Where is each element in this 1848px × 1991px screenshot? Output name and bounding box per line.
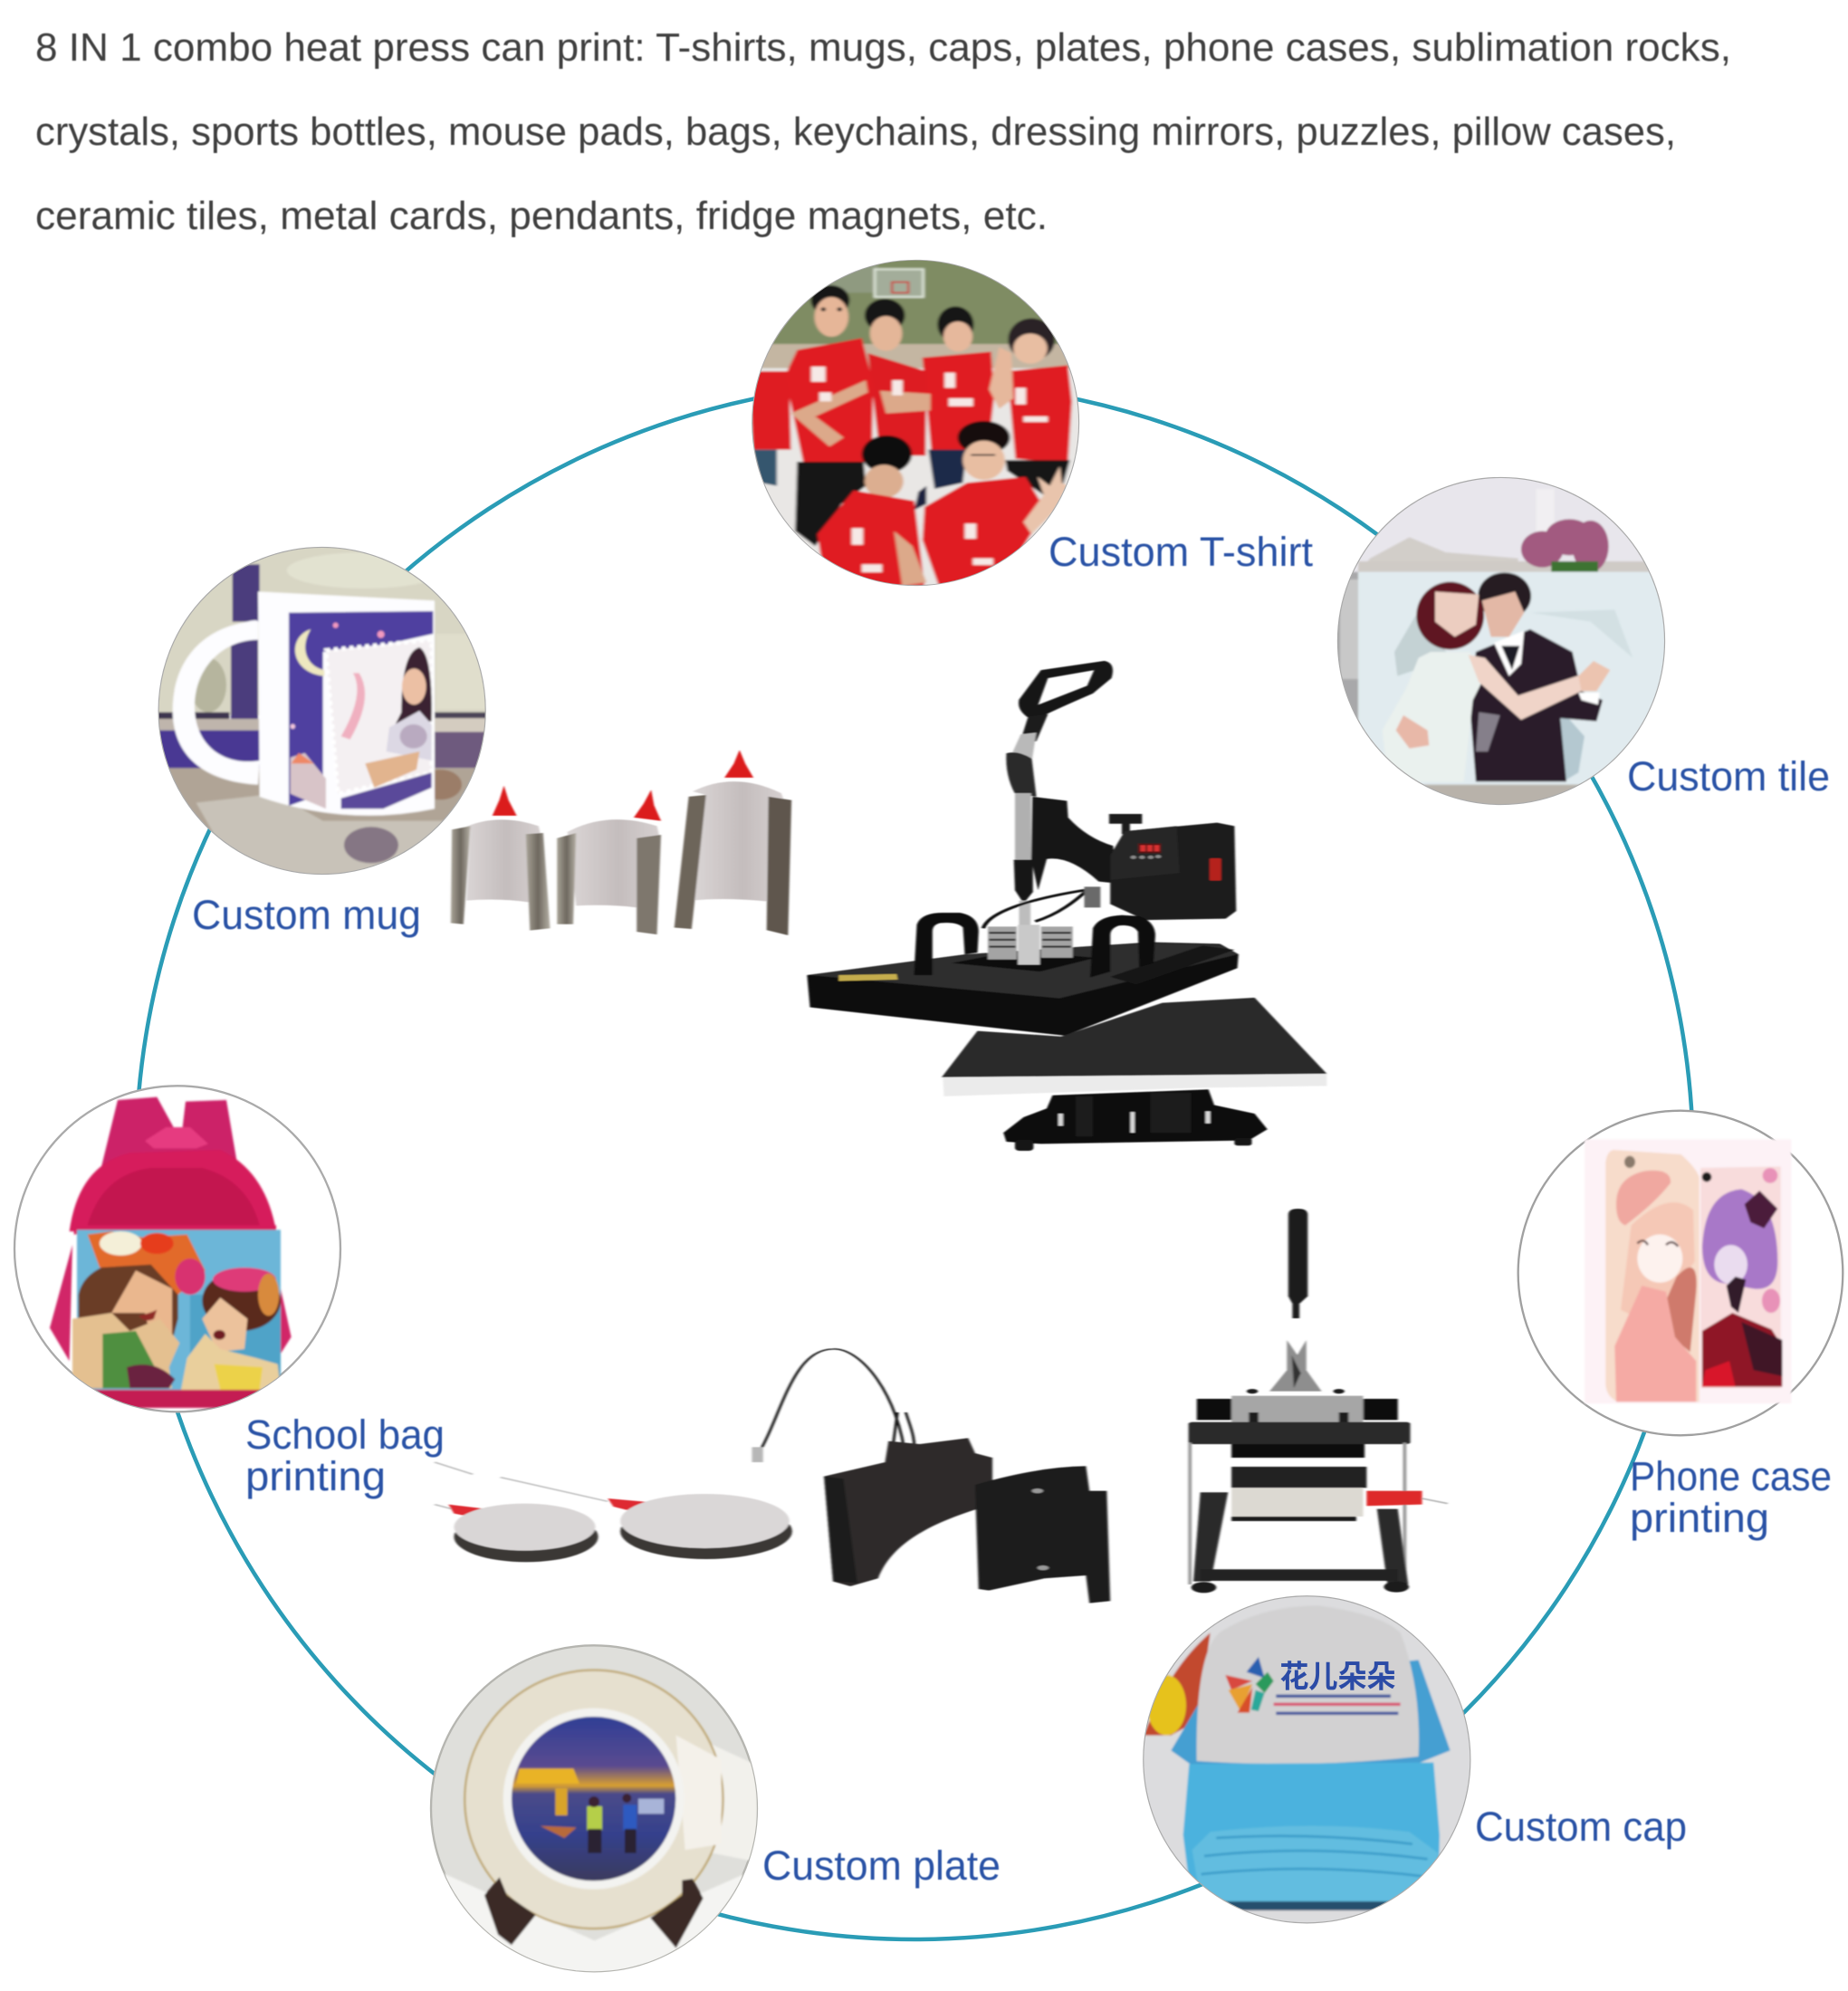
- platen handles: [914, 913, 979, 975]
- base: [1003, 1089, 1268, 1144]
- cap logo text: 花儿朵朵: [1279, 1660, 1396, 1694]
- intro text: crystals, sports bottles, mouse pads, bags, keychains, dressing mirrors, puzzles, pillow cases,: [35, 110, 1676, 154]
- intro text: 8 IN 1 combo heat press can print: T-shirts, mugs, caps, plates, phone cases, sublimation rocks,: [35, 25, 1731, 70]
- label: Custom plate: Custom plate: [762, 1843, 1001, 1889]
- cables: [983, 888, 1096, 928]
- accessory: mug press: [1189, 1209, 1448, 1593]
- circle photo: custom plate: [431, 1645, 758, 1974]
- label: School bag printing: printing: [245, 1453, 386, 1499]
- circle photo: custom T-shirt: [744, 256, 1088, 586]
- control box: [1109, 814, 1142, 834]
- insert: large mug right: [675, 750, 791, 935]
- label: Phone case printing: printing: [1630, 1495, 1769, 1541]
- circle photo: custom cap: [1132, 1594, 1476, 1938]
- intro text: ceramic tiles, metal cards, pendants, fridge magnets, etc.: [35, 194, 1048, 238]
- handle: [1019, 661, 1113, 718]
- central heat press machine: [807, 661, 1326, 1151]
- small plate press: [448, 1504, 598, 1562]
- intro text: [35, 25, 1731, 238]
- insert: small mug middle: [557, 790, 661, 934]
- label: Custom mug: Custom mug: [192, 892, 421, 938]
- label: Phone case printing: [1630, 1453, 1832, 1541]
- circle photo: phone cases: [1518, 1111, 1843, 1435]
- accessories: plate presses: [435, 1462, 792, 1562]
- insert: small mug left: [451, 786, 551, 931]
- circle photo: custom mug: [154, 543, 498, 889]
- spring assembly: [952, 956, 1096, 972]
- label: Custom tile: Custom tile: [1627, 753, 1830, 799]
- mug press inserts: [451, 750, 791, 935]
- label: Phone case printing: Phone case: [1630, 1453, 1832, 1499]
- circle photo: custom tile: [1331, 471, 1675, 815]
- label: Custom T-shirt: Custom T-shirt: [1048, 529, 1313, 575]
- lower platen: [942, 998, 1326, 1077]
- accessory: cap press with cable: [752, 1349, 1110, 1603]
- label: School bag printing: School bag: [245, 1412, 445, 1458]
- label: School bag printing: [245, 1412, 445, 1499]
- large plate press: [608, 1494, 792, 1559]
- label: Custom cap: Custom cap: [1475, 1804, 1687, 1850]
- upper heat platen: [807, 943, 1239, 1036]
- connecting ring: [136, 382, 1693, 1939]
- circle photo: school bag: [14, 1086, 340, 1412]
